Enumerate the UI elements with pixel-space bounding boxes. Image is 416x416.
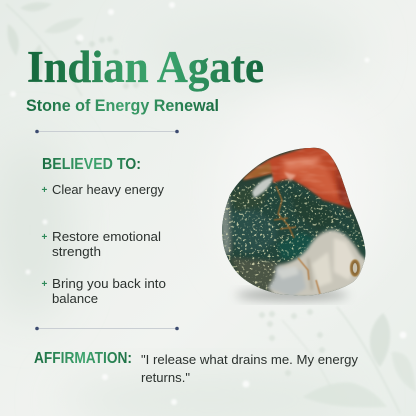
highlights: [252, 177, 273, 198]
subtitle: Stone of Energy Renewal: [26, 97, 219, 115]
red streak texture: [244, 150, 348, 204]
bullet: restore emotional strength: [42, 229, 161, 259]
affirmation: [34, 350, 362, 385]
ring mark: [350, 260, 360, 276]
bullet: restore emotional strength: +: [42, 232, 48, 243]
bullet: bring you back into balance: Bring you back into: [52, 276, 166, 291]
bullet: bring you back into balance: balance: [52, 291, 98, 306]
bullet: clear heavy energy: Clear heavy energy: [52, 182, 164, 197]
top divider: [35, 130, 179, 133]
bullet: restore emotional strength: Restore emotional: [52, 229, 161, 244]
bullet: clear heavy energy: +: [42, 185, 48, 196]
white chalcedony: [268, 230, 368, 298]
affirmation quote: "I release what drains me. My energy: [141, 352, 359, 367]
decorative leaves: bottom right: [259, 307, 416, 413]
bullet: restore emotional strength: strength: [52, 244, 101, 259]
bullet: bring you back into balance: +: [42, 279, 48, 290]
bullet: bring you back into balance: [42, 276, 166, 306]
title: Indian Agate: [27, 42, 264, 92]
decorative leaves: top left: [6, 2, 139, 96]
dark green body: [218, 178, 368, 296]
heading: believed to: BELIEVED TO:: [42, 156, 141, 173]
red cap: [243, 146, 351, 208]
affirmation label: AFFIRMATION:: [34, 350, 132, 367]
affirmation quote: returns.": [141, 370, 190, 385]
orange mineral veins: [274, 186, 320, 294]
stone shadow: [236, 290, 348, 300]
panel: believed to: [42, 156, 166, 306]
bottom divider: [35, 327, 179, 330]
speckles: [222, 178, 367, 296]
illustration: agate stone: [222, 148, 366, 296]
